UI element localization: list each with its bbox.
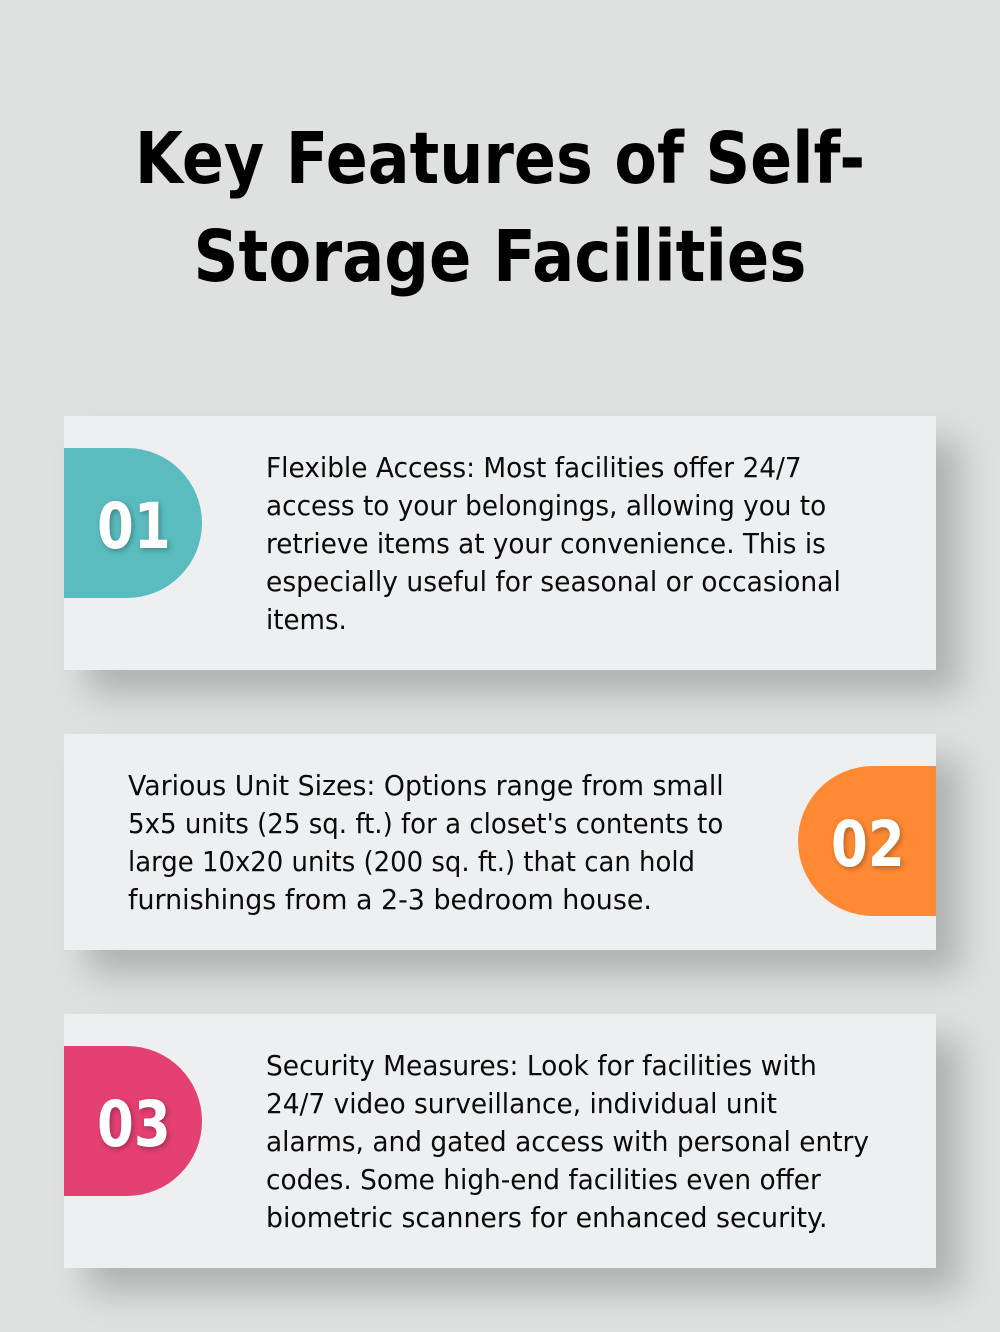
text: various unit sizes: furnishings from a 2-3 bedroom house.: [128, 884, 651, 916]
badge: 01: [64, 448, 202, 598]
badge: 02: 02: [831, 808, 905, 881]
text: various unit sizes: large 10x20 units (200 sq. ft.) that can hold: [128, 846, 695, 878]
text: various unit sizes: [128, 770, 723, 916]
text: flexible access: [266, 452, 840, 636]
title: [135, 117, 865, 298]
text: security measures: 24/7 video surveillance, individual unit: [266, 1088, 776, 1120]
text: security measures: Security Measures: Look for facilities with: [266, 1050, 816, 1082]
badge: 02: [798, 766, 936, 916]
text: various unit sizes: Various Unit Sizes: Options range from small: [128, 770, 723, 802]
text: flexible access: items.: [266, 604, 346, 636]
title: Storage Facilities: [194, 215, 806, 298]
text: security measures: [266, 1050, 869, 1234]
text: various unit sizes: 5x5 units (25 sq. ft.) for a closet's contents to: [128, 808, 723, 840]
badge: 03: [64, 1046, 202, 1196]
panel: security measures: [64, 1014, 936, 1268]
text: security measures: codes. Some high-end facilities even offer: [266, 1164, 820, 1196]
panel: various unit sizes: [64, 734, 936, 950]
text: flexible access: Flexible Access: Most facilities offer 24/7: [266, 452, 801, 484]
text: flexible access: access to your belongings, allowing you to: [266, 490, 826, 522]
text: flexible access: especially useful for seasonal or occasional: [266, 566, 840, 598]
text: security measures: alarms, and gated access with personal entry: [266, 1126, 869, 1158]
badge: 01: 01: [97, 490, 171, 563]
text: security measures: biometric scanners for enhanced security.: [266, 1202, 827, 1234]
panel: flexible access: [64, 416, 936, 670]
badge: 03: 03: [97, 1088, 171, 1161]
title: Key Features of Self-: [135, 117, 865, 200]
text: flexible access: retrieve items at your convenience. This is: [266, 528, 825, 560]
